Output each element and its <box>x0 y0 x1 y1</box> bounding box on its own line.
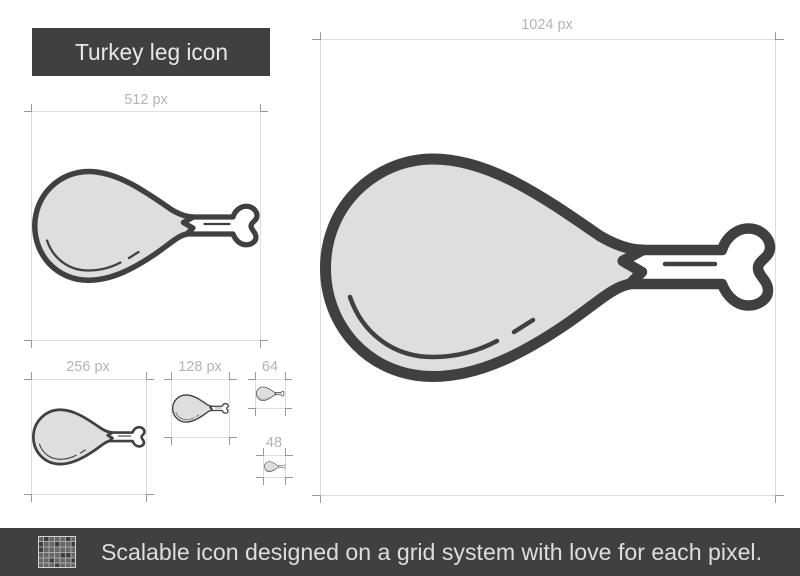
size label: 256 px: 256 px <box>66 359 111 375</box>
icon: pixel grid <box>38 536 76 568</box>
size label: 512 px: 512 px <box>124 92 169 108</box>
panel: 1024 px preview <box>312 17 784 503</box>
panel: 48 px preview <box>256 435 293 485</box>
grid frame: 128 px <box>164 372 237 445</box>
icon: turkey leg 1024 <box>326 159 770 376</box>
grid frame: 512 px <box>24 104 268 348</box>
size label: 48: 48 <box>266 435 282 451</box>
panel: 512 px preview <box>24 92 268 348</box>
size label: 128 px: 128 px <box>178 359 223 375</box>
grid frame: 256 px <box>24 372 154 502</box>
icon: turkey leg 64 <box>256 387 284 401</box>
icon: turkey leg 256 <box>33 410 144 464</box>
panel: 64 px preview <box>248 359 292 416</box>
footer bar <box>0 528 800 576</box>
grid frame: 1024 px <box>312 32 784 503</box>
footer tagline: Scalable icon designed on a grid system with love for each pixel. <box>101 539 762 565</box>
grid frame: 64 px <box>248 372 292 416</box>
title banner: Turkey leg icon <box>75 39 228 65</box>
panel: 256 px preview <box>24 359 154 502</box>
size label: 64: 64 <box>262 359 278 375</box>
grid frame: 48 px <box>256 448 293 485</box>
icon: turkey leg 512 <box>35 172 257 280</box>
panel: 128 px preview <box>164 359 237 445</box>
title banner <box>32 28 270 76</box>
icon: turkey leg 128 <box>173 395 228 422</box>
size label: 1024 px: 1024 px <box>521 17 574 33</box>
icon: turkey leg 48 <box>264 461 285 472</box>
